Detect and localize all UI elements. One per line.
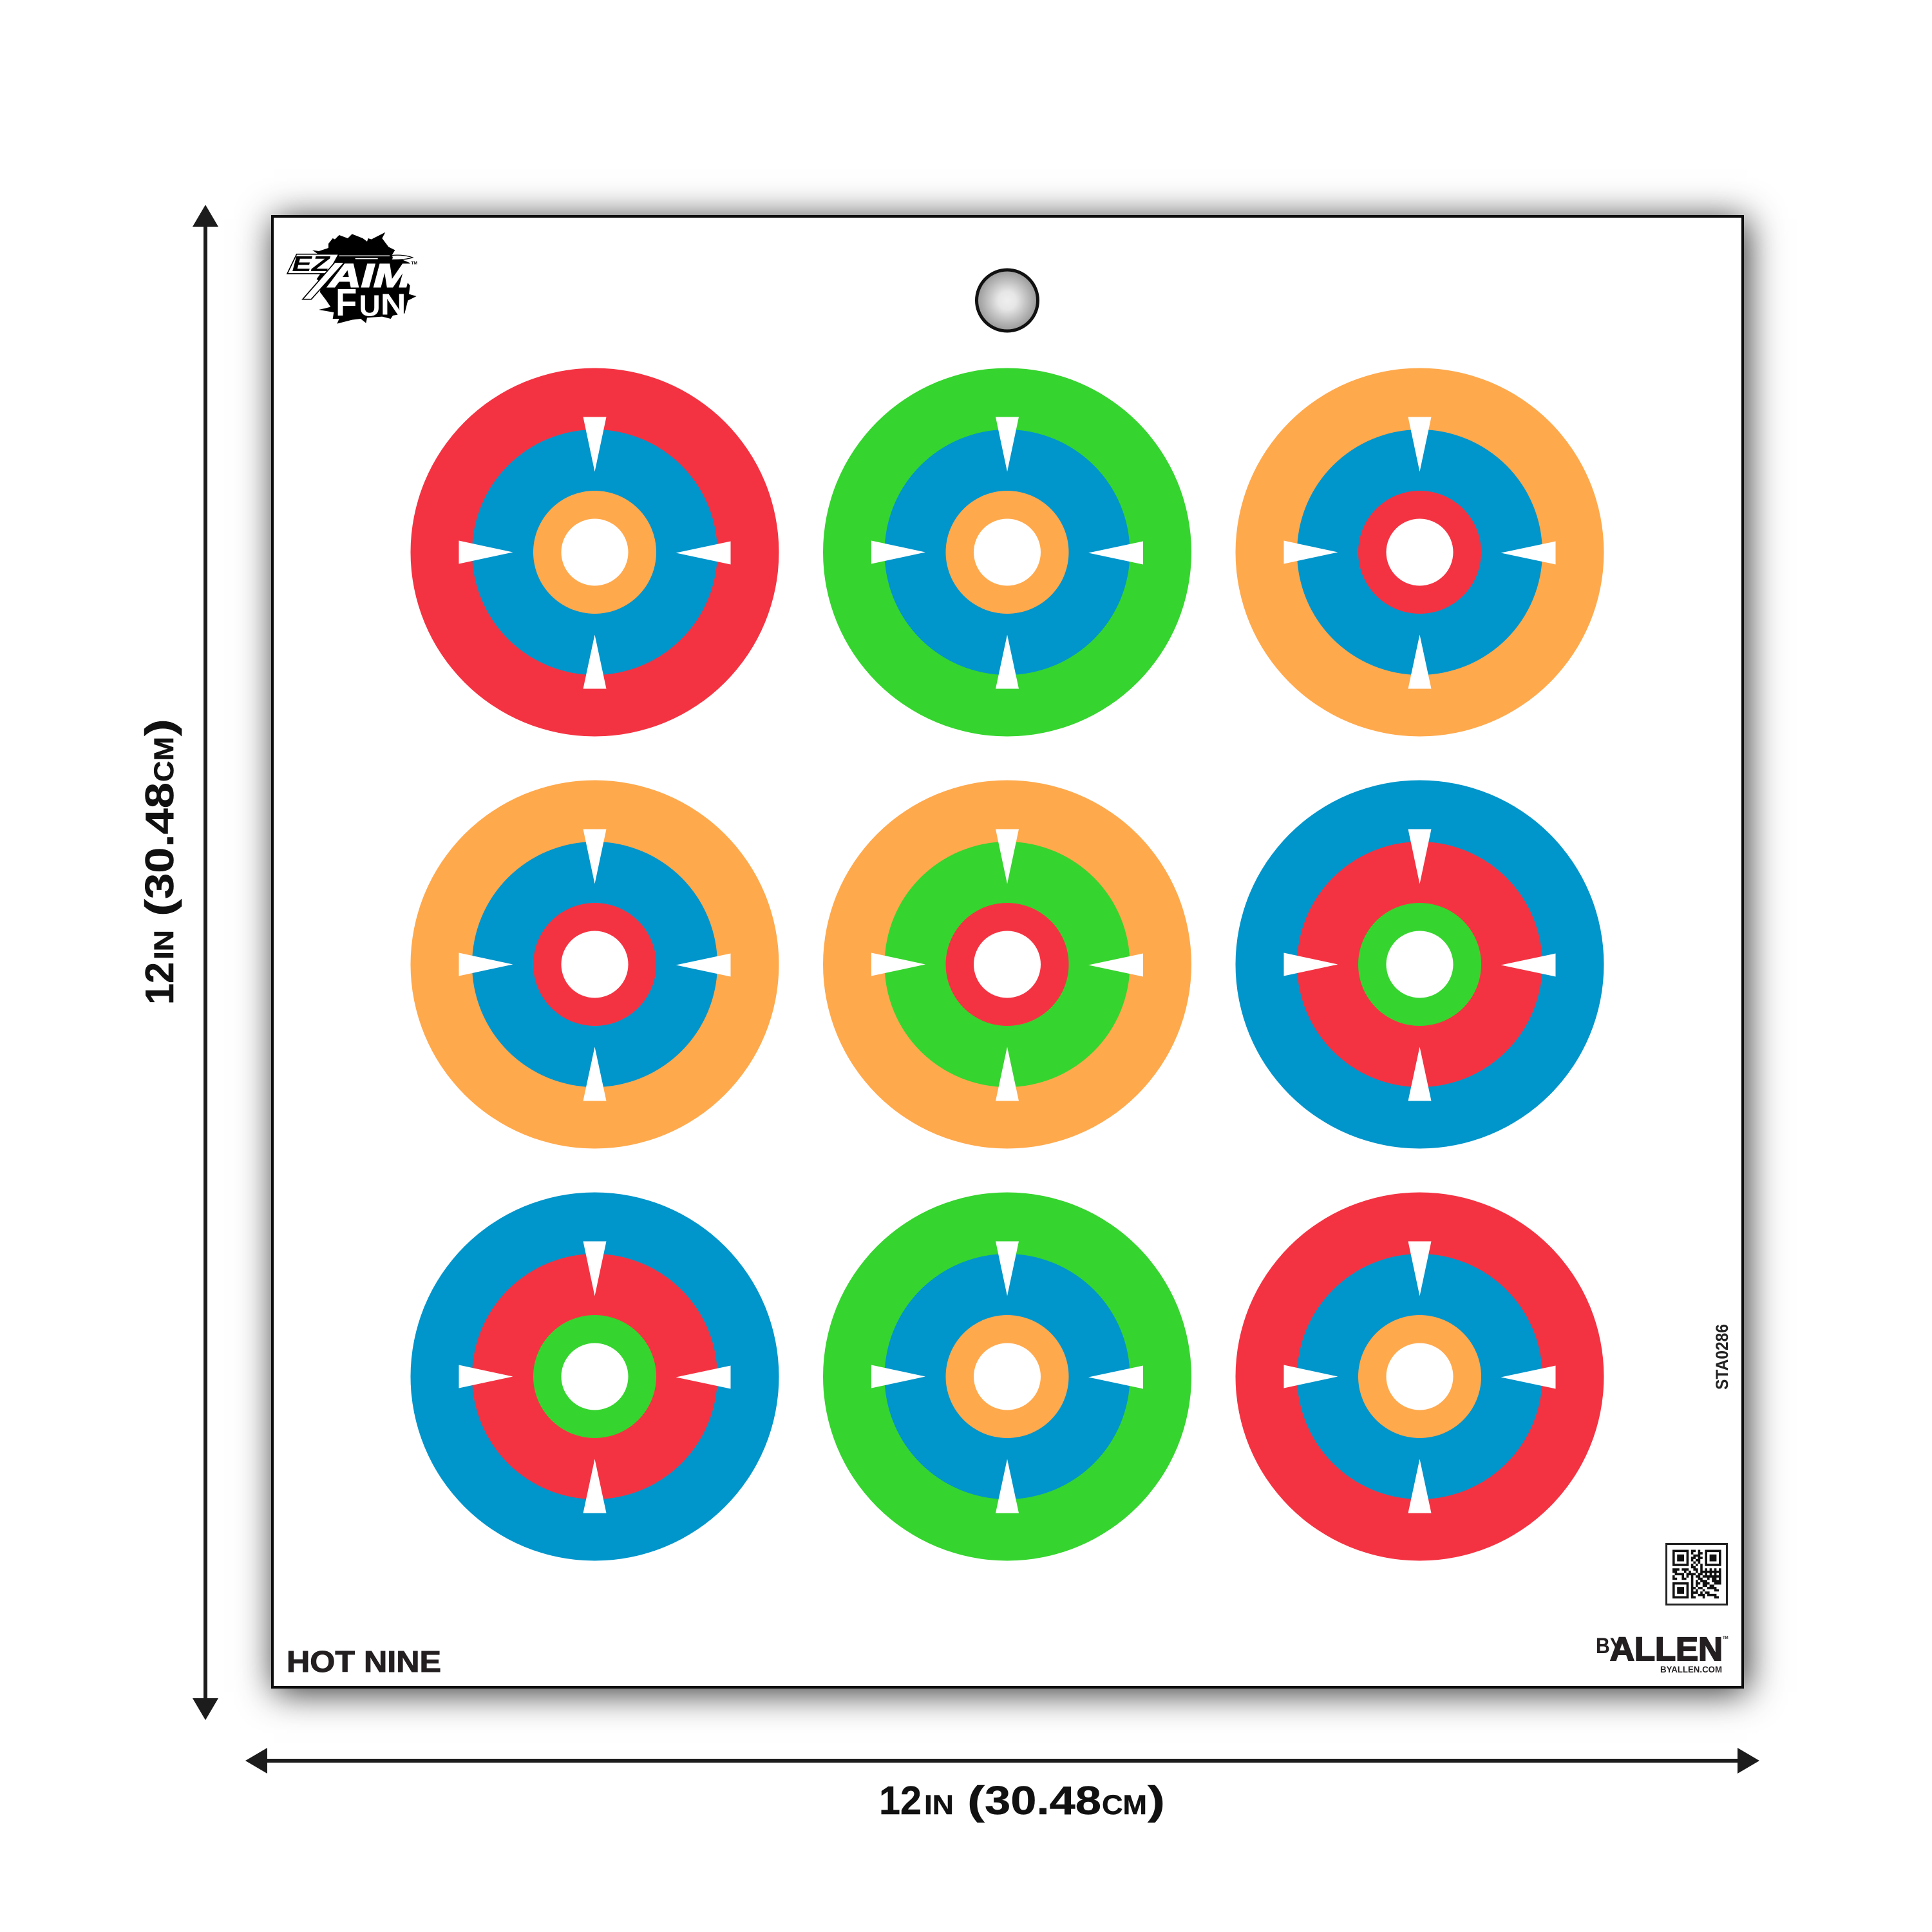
- arrow: height dimension: [193, 205, 218, 1720]
- target: row 1 column 2: [823, 368, 1191, 737]
- target: row 1 column 1: [411, 368, 779, 737]
- target: row 2 column 1: [411, 781, 779, 1149]
- label: width: 12: [879, 1779, 922, 1823]
- label: width: (: [967, 1779, 985, 1823]
- target: row 3 column 1: [411, 1193, 779, 1561]
- logo: EZ Aim Fun: EZ: [292, 252, 331, 276]
- logo: EZ Aim Fun: TM: [411, 261, 417, 266]
- label: height: ): [138, 719, 182, 736]
- label: height: IN: [149, 930, 180, 960]
- label: height: [138, 719, 182, 1005]
- logo: EZ Aim Fun: [287, 232, 417, 324]
- target: row 3 column 3: [1235, 1193, 1604, 1561]
- target: row 2 column 3: [1235, 781, 1604, 1149]
- label: width: IN: [924, 1790, 954, 1821]
- logo: By Allen: TM: [1723, 1636, 1728, 1640]
- label: height: 12: [138, 962, 182, 1005]
- label: width: ): [1148, 1779, 1165, 1823]
- QR code: [1667, 1544, 1727, 1605]
- arrow: width dimension: [245, 1748, 1759, 1774]
- logo: EZ Aim Fun: N: [381, 287, 406, 321]
- logo: EZ Aim Fun: U: [359, 289, 381, 323]
- logo: EZ Aim Fun: F: [336, 281, 357, 324]
- logo: By Allen: BYALLEN.COM: [1660, 1665, 1722, 1674]
- product name: HOT NINE: [287, 1645, 441, 1678]
- target: row 2 column 2: [823, 781, 1191, 1149]
- target: row 3 column 2: [823, 1193, 1191, 1561]
- panel: target sheet: [271, 215, 1744, 1689]
- logo: EZ Aim Fun: AIM: [327, 257, 412, 294]
- logo: By Allen: ALLEN: [1610, 1631, 1723, 1667]
- label: height: CM: [149, 737, 180, 782]
- label: width: CM: [1102, 1790, 1147, 1821]
- label: height: 30.48: [138, 782, 182, 899]
- icon: hanging hole: [976, 270, 1038, 331]
- logo: By Allen: [1596, 1631, 1728, 1674]
- label: width: [879, 1779, 1165, 1823]
- target: row 1 column 3: [1235, 368, 1604, 737]
- logo: By Allen: BY: [1596, 1634, 1623, 1658]
- product code: STA0286: [1712, 1324, 1732, 1390]
- label: height: (: [138, 899, 182, 916]
- label: width: 30.48: [985, 1779, 1101, 1823]
